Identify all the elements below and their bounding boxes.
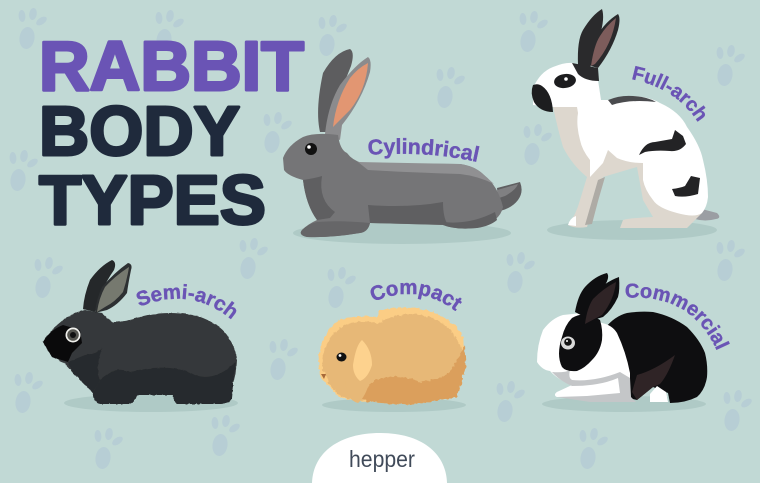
- rabbit: commercial: [537, 273, 730, 412]
- logo badge: [312, 433, 447, 483]
- label: Full-arch: Full-arch: [632, 66, 706, 122]
- rabbit: full-arch: [532, 9, 720, 240]
- beige chest and legs: [553, 105, 706, 228]
- rabbit: compact: [318, 282, 466, 412]
- white coat: [533, 63, 708, 216]
- rabbit: semi-arch: [42, 260, 238, 412]
- label: Compact: Compact: [370, 282, 462, 311]
- label: Commercial: Commercial: [626, 283, 730, 350]
- title: BODY: [39, 92, 240, 170]
- logo badge: hepper: [349, 446, 415, 472]
- rabbit: cylindrical: [283, 49, 522, 244]
- title: RABBIT: [39, 27, 304, 105]
- label: Cylindrical: Cylindrical: [368, 138, 480, 162]
- title: TYPES: [39, 161, 266, 239]
- label: Semi-arch: Semi-arch: [136, 284, 236, 320]
- title: [39, 27, 304, 239]
- white coat: [537, 313, 630, 397]
